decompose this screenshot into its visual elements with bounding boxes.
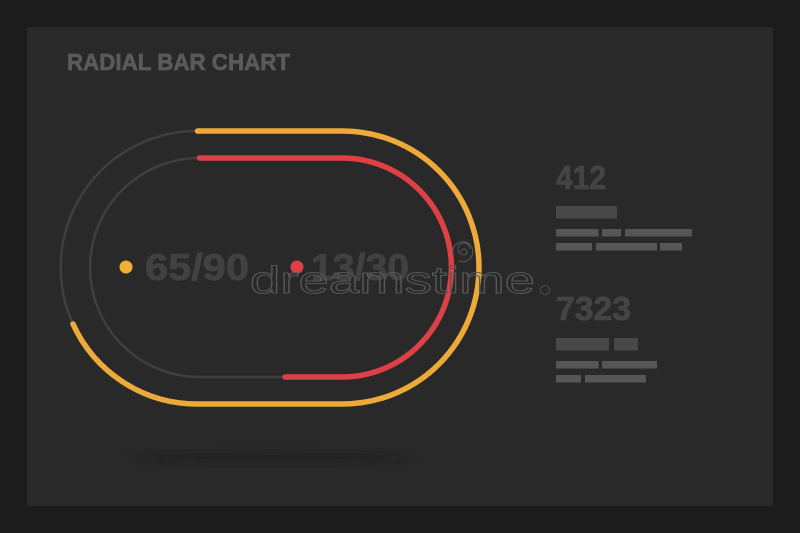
placeholder text lines xyxy=(556,361,657,382)
legend: red value xyxy=(290,247,409,288)
radial bar chart xyxy=(61,131,479,404)
stat label bars xyxy=(556,338,638,350)
inner track xyxy=(90,158,284,377)
watermark word: dreamstime xyxy=(250,260,535,302)
stat label bar xyxy=(556,206,617,218)
placeholder text lines xyxy=(556,229,692,250)
stat block: 7323 xyxy=(556,290,657,382)
gold value text: 65/90 xyxy=(145,247,249,288)
chart shadow xyxy=(140,454,400,462)
red value text: 13/30 xyxy=(311,247,409,288)
stat block: 412 xyxy=(556,159,692,250)
watermark xyxy=(250,242,550,302)
title: RADIAL BAR CHART xyxy=(67,49,291,75)
watermark spiral xyxy=(453,242,473,262)
red dot xyxy=(290,260,304,274)
outer gold bar xyxy=(73,131,479,404)
watermark registered mark xyxy=(540,286,550,294)
legend: gold value xyxy=(120,247,249,288)
inner red bar xyxy=(200,158,451,377)
outer track xyxy=(61,131,197,324)
stat number: 7323 xyxy=(556,290,631,327)
stat number: 412 xyxy=(556,159,606,196)
gold dot xyxy=(120,260,132,274)
